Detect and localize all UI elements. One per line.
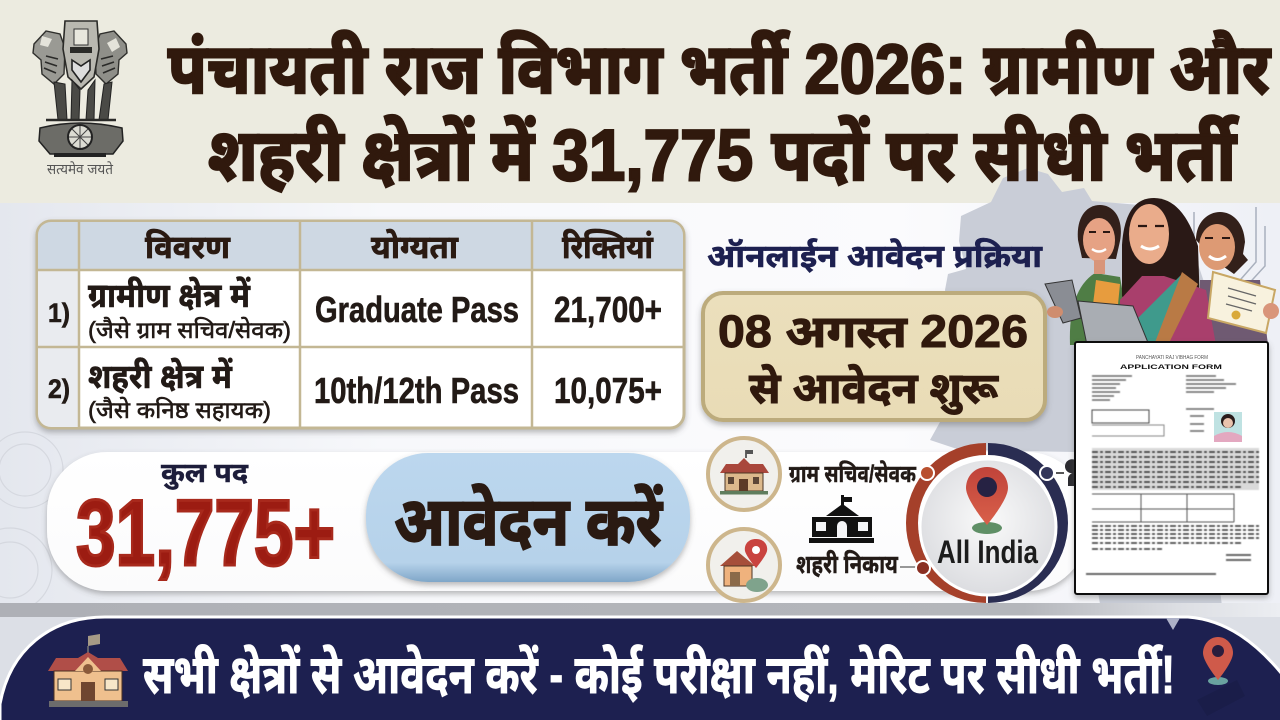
hand left [1047, 306, 1063, 318]
tablet [1045, 280, 1081, 323]
icon: village school [708, 438, 780, 510]
label: village secretary: ग्राम सचिव/सेवक [789, 460, 917, 488]
lion right [95, 31, 127, 84]
total posts number: 31,775+ [76, 480, 335, 585]
application form document [1075, 342, 1268, 594]
heading: online process: ऑनलाईन आवेदन प्रक्रिया [707, 238, 1043, 274]
page background [0, 203, 1280, 603]
laptop [1078, 301, 1149, 345]
table row 2 [48, 357, 662, 423]
total posts label: कुल पद [161, 458, 249, 489]
certificate [1208, 272, 1275, 333]
emblem: national emblem [33, 21, 127, 177]
icon: urban home with pin [708, 529, 780, 601]
table row 1: Graduate Pass [315, 289, 519, 330]
icon: government building [809, 495, 874, 543]
circuit lines [1183, 207, 1265, 290]
hand right [1263, 303, 1279, 319]
legs [54, 80, 112, 120]
table row 2: 10th/12th Pass [314, 370, 519, 411]
woman left [1070, 205, 1132, 345]
form table [1092, 494, 1234, 522]
date callout: से आवेदन शुरू [749, 364, 999, 414]
table header row: विवरण [145, 229, 231, 265]
table row 1: (जैसे ग्राम सचिव/सेवक) [88, 317, 291, 343]
people illustration [1045, 198, 1279, 345]
ring: all india [912, 449, 1079, 597]
table row 2: 2) [48, 374, 70, 404]
date callout: 08 अगस्त 2026 [718, 306, 1028, 357]
grey map silhouette [930, 168, 1222, 614]
abacus base [39, 123, 123, 154]
title [168, 30, 1271, 196]
table header row [38, 222, 683, 270]
table header row: रिक्तियां [562, 229, 654, 265]
date callout [703, 293, 1045, 420]
table row 1: 1) [48, 298, 70, 328]
icon: location pin [1197, 637, 1245, 716]
table: posts and vacancies [37, 221, 684, 428]
woman right [1196, 212, 1268, 345]
all india label: All India [937, 534, 1038, 570]
form paragraph [1092, 448, 1259, 490]
footer: separator strip [0, 603, 1280, 720]
table row 1: 21,700+ [554, 289, 662, 330]
woman center [1120, 198, 1216, 345]
decorative mandala left [0, 432, 63, 612]
table row 2: (जैसे कनिष्ठ सहायक) [88, 397, 271, 423]
apply button: आवेदन करें [394, 484, 664, 560]
footer banner [0, 617, 1280, 720]
table row 1: ग्रामीण क्षेत्र में [88, 276, 251, 315]
table header row: योग्यता [371, 229, 459, 265]
table row 2: शहरी क्षेत्र में [88, 357, 233, 396]
lion centre [63, 21, 99, 89]
panel: total posts and apply [47, 452, 1087, 591]
table row 1 [48, 276, 662, 343]
icon: school house [48, 634, 128, 707]
label: urban body: शहरी निकाय [796, 549, 898, 579]
emblem motto: सत्यमेव जयते [47, 160, 114, 177]
header band [0, 0, 1280, 203]
application form document: PANCHAYATI RAJ VIBHAG FORM [1136, 355, 1208, 361]
application form document: APPLICATION FORM [1120, 365, 1222, 371]
map pin [966, 467, 1008, 534]
lion left [33, 31, 65, 84]
table row 2: 10,075+ [554, 370, 662, 411]
apply button [366, 453, 690, 582]
form photo [1214, 412, 1242, 442]
